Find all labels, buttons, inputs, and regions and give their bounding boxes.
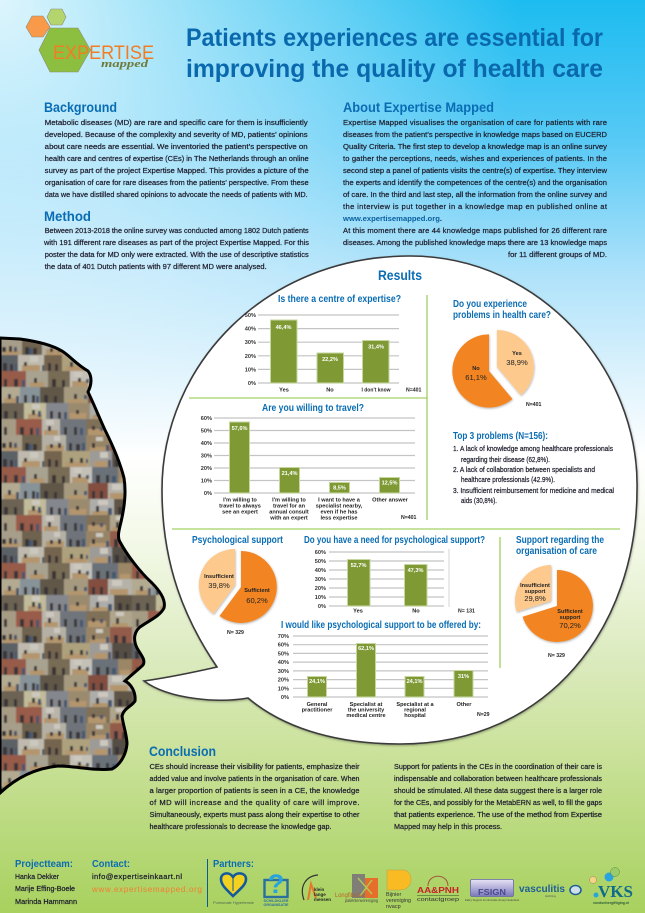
chart: are you willing to travel: 12,5% bbox=[382, 480, 397, 486]
chart: do you experience problems in health care: 61,1% bbox=[465, 373, 487, 382]
logo: longfibrose: Longfibrose bbox=[335, 893, 366, 899]
panel: about expertise mapped bbox=[342, 100, 608, 259]
top 3 problems: regarding their disease (62,8%). bbox=[461, 455, 550, 464]
chart: are you willing to travel: less expertise bbox=[320, 516, 358, 522]
chart title: Psychological support bbox=[192, 535, 283, 546]
chart: is there a centre of expertise: 50% bbox=[245, 313, 256, 319]
chart: are you willing to travel: I'm willing to bbox=[272, 498, 306, 504]
chart: are you willing to travel: see an expert bbox=[222, 510, 258, 516]
logo: vasculitis bbox=[519, 884, 581, 898]
logo: FSIGN bbox=[465, 880, 519, 902]
text: method body: the data of 401 Dutch patients with 97 different MD were analysed. bbox=[45, 262, 267, 271]
chart: psychological support: 39,8% bbox=[208, 581, 230, 590]
title: improving the quality of health care bbox=[186, 55, 603, 83]
chart: are you willing to travel: N=401 bbox=[401, 515, 417, 521]
chart: is there a centre of expertise bbox=[245, 294, 422, 394]
heading: about: About Expertise Mapped bbox=[343, 100, 494, 115]
text: about body: to gather the perceptions, needs, wishes and experiences of patients. In the bbox=[343, 154, 607, 163]
logo: klein lange mensen: lange bbox=[314, 892, 326, 897]
footer: project team: Hanka Dekker bbox=[15, 872, 59, 881]
chart: are you willing to travel: specialist nearby, bbox=[316, 504, 363, 510]
chart: do you experience problems in health care: Yes bbox=[512, 351, 522, 357]
logo: question mark: ORGANISATIE bbox=[264, 903, 289, 907]
chart: need for psychological support: 20% bbox=[315, 586, 326, 592]
chart: are you willing to travel: Other answer bbox=[372, 498, 409, 504]
text: conclusion left column bbox=[150, 762, 360, 831]
text: background body: developed. Because of the complexity and severity of MD, patients’ opinions bbox=[45, 130, 308, 139]
logo: VKS: voedselvergiftiging.nl bbox=[593, 901, 629, 905]
chart: psychological support to be offered by: 50% bbox=[278, 651, 289, 657]
chart: psychological support to be offered by: 30% bbox=[278, 669, 289, 675]
chart: are you willing to travel: 57,6% bbox=[232, 426, 247, 432]
chart: support regarding the organisation of care: organisation of care bbox=[516, 546, 597, 557]
chart: psychological support to be offered by: 24,1% bbox=[309, 679, 325, 685]
text: method body bbox=[43, 226, 309, 271]
logo: AA&PNH contactgroep: AA&PNH bbox=[417, 886, 459, 895]
text: about body: diseases from the patient’s perspective in knowledge maps based on EUCERD bbox=[343, 130, 608, 139]
text: background body: survey as part of the project Expertise Mapped. This provides a picture of the bbox=[45, 166, 309, 175]
footer: contact: www.expertisemapped.org bbox=[91, 885, 202, 894]
chart: are you willing to travel: travel to always bbox=[219, 504, 261, 510]
top 3 problems: 3. Insufficient reimbursement for medicine and medical bbox=[453, 486, 614, 495]
text: about body: www.expertisemapped.org. bbox=[342, 214, 442, 223]
chart: need for psychological support: 10% bbox=[315, 595, 326, 601]
chart: support regarding the organisation of care: Sufficient bbox=[557, 609, 583, 615]
chart: are you willing to travel: annual consult bbox=[269, 510, 309, 516]
chart: do you experience problems in health care: problems in health care? bbox=[453, 310, 551, 321]
chart: are you willing to travel: 60% bbox=[201, 416, 212, 422]
chart: are you willing to travel: 8,5% bbox=[333, 486, 346, 492]
chart title: I would like psychological support to be offered by: bbox=[281, 620, 481, 631]
text: conclusion right column: that patients experience. The use of the method from Expertise bbox=[394, 810, 602, 819]
chart: is there a centre of expertise: 30% bbox=[245, 340, 256, 346]
chart: psychological support to be offered by: 0% bbox=[281, 695, 289, 701]
chart: is there a centre of expertise: Yes bbox=[279, 388, 289, 394]
chart title: Are you willing to travel? bbox=[262, 403, 364, 414]
chart: support regarding the organisation of care: 70,2% bbox=[559, 621, 581, 630]
chart: are you willing to travel: travel for an bbox=[273, 504, 306, 510]
chart: psychological support to be offered by: the university bbox=[348, 708, 385, 714]
text: about body: for 11 different groups of MD. bbox=[508, 250, 607, 259]
chart: are you willing to travel: 21,4% bbox=[282, 471, 297, 477]
chart: psychological support to be offered by: practitioner bbox=[302, 708, 333, 714]
text: about body: diseases. Among the published knowledge maps there are 13 knowledge maps bbox=[343, 238, 607, 247]
text: about body: Expertise Mapped visualises the organisation of care for patients with rare bbox=[343, 118, 607, 127]
chart: psychological support to be offered by: Specialist at a bbox=[396, 702, 435, 708]
chart: support regarding the organisation of care: 29,8% bbox=[524, 594, 546, 603]
footer: partners bbox=[208, 858, 633, 910]
chart: need for psychological support: No bbox=[412, 608, 420, 614]
chart: psychological support to be offered by bbox=[278, 620, 490, 719]
chart: support regarding the organisation of care bbox=[515, 535, 604, 659]
logo: question mark bbox=[264, 869, 289, 907]
text: conclusion left column: added value and involve patients in the organisation of care. When bbox=[150, 774, 360, 783]
logo: longfibrose bbox=[335, 874, 378, 903]
chart: are you willing to travel: even if he has bbox=[320, 510, 358, 516]
chart: are you willing to travel bbox=[201, 403, 417, 522]
heading: results: Results bbox=[378, 268, 422, 283]
chart: psychological support to be offered by: medical centre bbox=[346, 713, 386, 719]
panel: conclusion bbox=[149, 744, 602, 831]
logo: question mark: SCHILDKLIER bbox=[264, 899, 289, 903]
footer: contact bbox=[91, 858, 202, 894]
logo: VKS bbox=[590, 868, 633, 905]
text: background body: health care and centres of expertise (CEs) in The Netherlands through an online bbox=[45, 154, 309, 163]
chart: do you experience problems in health care: No bbox=[472, 366, 480, 372]
logo: VKS: VKS bbox=[598, 882, 633, 901]
chart: psychological support to be offered by: 70% bbox=[278, 634, 289, 640]
chart: need for psychological support: 60% bbox=[315, 550, 326, 556]
chart: support regarding the organisation of care: support bbox=[525, 589, 546, 595]
logo: bijnier vereniging nvacp bbox=[386, 870, 411, 910]
text: background body: organisation of care for rare diseases from the patients’ perspective. From these bbox=[45, 178, 309, 187]
chart: is there a centre of expertise: 22,2% bbox=[322, 357, 338, 363]
chart: support regarding the organisation of care: Insufficient bbox=[520, 583, 550, 589]
chart: are you willing to travel: 20% bbox=[201, 466, 212, 472]
footer: project team bbox=[15, 858, 77, 906]
panel: method bbox=[43, 209, 309, 271]
footer: contact: Contact: bbox=[92, 858, 130, 870]
text: conclusion right column: for the CEs, and possibly for the MetabERN as well, to fill the gaps bbox=[394, 798, 602, 807]
chart: do you experience problems in health care: N=401 bbox=[526, 402, 542, 408]
footer: project team: Marije Effing-Boele bbox=[15, 884, 75, 893]
text: method body: Between 2013-2018 the online survey was conducted among 1802 Dutch patients bbox=[45, 226, 309, 235]
text: conclusion left column: a larger proportion of patients is seen in a CE, the knowledge bbox=[150, 786, 360, 795]
chart: support regarding the organisation of care: N= 329 bbox=[548, 653, 565, 659]
logo: question mark: ? bbox=[268, 869, 284, 899]
logo: Expertise Mapped: EXPERTISE bbox=[53, 43, 154, 64]
logo: klein lange mensen bbox=[302, 875, 331, 902]
footer: project team: Projectteam: bbox=[15, 858, 73, 870]
heading: method: Method bbox=[44, 209, 91, 224]
logo: AA&PNH contactgroep: contactgroep bbox=[417, 897, 459, 903]
chart: is there a centre of expertise: 46,4% bbox=[276, 325, 291, 331]
chart: psychological support to be offered by: 62,1% bbox=[358, 646, 374, 652]
chart: need for psychological support: Yes bbox=[353, 608, 363, 614]
chart title: Is there a centre of expertise? bbox=[278, 294, 401, 305]
logo: AA&PNH contactgroep bbox=[417, 876, 459, 903]
chart: psychological support to be offered by: 31% bbox=[458, 674, 469, 680]
chart: is there a centre of expertise: 10% bbox=[245, 368, 256, 374]
text: about body bbox=[342, 118, 608, 259]
text: conclusion right column: should be stimulated. All these data suggest there is a larger role bbox=[394, 786, 602, 795]
chart: need for psychological support: 52,7% bbox=[351, 563, 366, 569]
logo: pulmonale hypertensie: Pulmonale Hypertensie bbox=[213, 901, 254, 905]
footer: partners: Partners: bbox=[213, 858, 254, 870]
text: about body: of care. In the third and last step, all the information from the online survey and bbox=[343, 190, 607, 199]
chart: psychological support: Sufficient bbox=[244, 588, 270, 594]
text: about body: the experts and identify the competences of the centre(s) and the organisation bbox=[343, 178, 607, 187]
text: conclusion right column bbox=[394, 762, 602, 831]
text: background body: data we have distilled shared opinions to advocate the needs of patients with MD. bbox=[45, 190, 308, 199]
logo: vasculitis: stichting bbox=[545, 894, 556, 898]
chart: need for psychological support: N= 131 bbox=[458, 608, 475, 614]
dividers bbox=[172, 295, 620, 668]
chart: need for psychological support: 47,3% bbox=[408, 568, 423, 574]
chart: are you willing to travel: 40% bbox=[201, 441, 212, 447]
panel: background bbox=[44, 100, 309, 199]
chart: psychological support: Insufficient bbox=[204, 574, 234, 580]
chart: is there a centre of expertise: 31,4% bbox=[368, 344, 384, 350]
text: background body bbox=[45, 118, 309, 199]
chart: psychological support: 60,2% bbox=[246, 596, 268, 605]
chart: do you experience problems in health care: 38,9% bbox=[506, 358, 528, 367]
text: conclusion right column: indispensable and collaboration between healthcare professionals bbox=[394, 774, 602, 783]
top 3 problems: 2. A lack of collaboration between specialists and bbox=[453, 465, 595, 474]
footer: contact: info@expertiseinkaart.nl bbox=[92, 872, 182, 881]
text: conclusion right column: Support for patients in the CEs in the coordination of their care is bbox=[394, 762, 602, 771]
chart: need for psychological support: 40% bbox=[315, 568, 326, 574]
chart: are you willing to travel: with an expert bbox=[269, 516, 308, 522]
text: about body: Quality Criteria. The first step to develop a knowledge map is an online survey bbox=[343, 142, 607, 151]
chart: psychological support to be offered by: 20% bbox=[278, 678, 289, 684]
logo: bijnier vereniging nvacp: Bijnier bbox=[386, 892, 401, 898]
logo: bijnier vereniging nvacp: vereniging bbox=[386, 898, 411, 904]
chart: psychological support to be offered by: General bbox=[307, 702, 328, 708]
title bbox=[186, 24, 603, 83]
top 3 problems: 1. A lack of knowledge among healthcare professionals bbox=[453, 444, 613, 453]
logo: vasculitis: vasculitis bbox=[519, 884, 565, 895]
chart title: Do you have a need for psychological support? bbox=[304, 535, 485, 546]
text: conclusion left column: Simultaneously, experts must pass along their expertise to other bbox=[150, 810, 360, 819]
chart: psychological support to be offered by: N=29 bbox=[477, 712, 490, 718]
chart: need for psychological support bbox=[304, 535, 485, 614]
top 3 problems bbox=[453, 431, 614, 505]
logo: klein lange mensen: mensen bbox=[314, 897, 331, 902]
chart: psychological support to be offered by: 40% bbox=[278, 660, 289, 666]
chart: are you willing to travel: 10% bbox=[201, 478, 212, 484]
footer: project team: Marinda Hammann bbox=[15, 897, 77, 906]
chart: is there a centre of expertise: N=401 bbox=[406, 388, 422, 394]
chart: psychological support: N= 329 bbox=[227, 630, 244, 636]
top 3 problems: healthcare professionals (42.9%). bbox=[461, 475, 555, 484]
text: about body: the interview is put together in a knowledge map en published online at bbox=[343, 202, 608, 211]
text: background body: Metabolic diseases (MD) are rare and specific care for them is insufficiently bbox=[45, 118, 308, 127]
chart: psychological support to be offered by: 10% bbox=[278, 686, 289, 692]
chart: is there a centre of expertise: 20% bbox=[245, 354, 256, 360]
heading: background: Background bbox=[44, 100, 117, 115]
chart: is there a centre of expertise: No bbox=[326, 388, 334, 394]
chart: is there a centre of expertise: 40% bbox=[245, 327, 256, 333]
chart: need for psychological support: 50% bbox=[315, 559, 326, 565]
text: about body: second step a panel of patients visits the centre(s) of expertise. They interview bbox=[343, 166, 608, 175]
text: background body: about care needs are essential. We inventoried the patient’s perspective on bbox=[45, 142, 308, 151]
chart: need for psychological support: 30% bbox=[315, 577, 326, 583]
heading: top 3: Top 3 problems (N=156): bbox=[453, 431, 548, 442]
chart: psychological support to be offered by: Specialist at bbox=[350, 702, 382, 708]
text: conclusion right column: Mapped may help in this process. bbox=[394, 822, 502, 831]
speech bubble bbox=[144, 256, 637, 744]
title: Patients experiences are essential for bbox=[186, 24, 603, 52]
heading: conclusion: Conclusion bbox=[149, 744, 216, 759]
text: method body: with 191 different rare diseases as part of the project Expertise Mapped. For this bbox=[43, 238, 309, 247]
photo mosaic face silhouette bbox=[0, 338, 164, 793]
chart: support regarding the organisation of care: support bbox=[560, 615, 581, 621]
chart: psychological support to be offered by: Other bbox=[457, 702, 472, 708]
chart: are you willing to travel: I want to have a bbox=[318, 498, 361, 504]
logo: Expertise Mapped bbox=[26, 9, 154, 72]
text: conclusion left column: CEs should increase their visibility for patients, emphasize their bbox=[150, 762, 360, 771]
chart: are you willing to travel: 30% bbox=[201, 454, 212, 460]
chart: need for psychological support: 0% bbox=[318, 604, 326, 610]
text: conclusion left column: of MD will increase and the quality of care will improve. bbox=[150, 798, 360, 807]
chart: psychological support bbox=[192, 535, 283, 636]
chart: psychological support to be offered by: regional bbox=[404, 708, 426, 714]
chart: are you willing to travel: 0% bbox=[204, 491, 212, 497]
chart: are you willing to travel: I'm willing to bbox=[223, 498, 257, 504]
chart: psychological support to be offered by: 24,1% bbox=[407, 679, 422, 685]
logo: bijnier vereniging nvacp: nvacp bbox=[386, 904, 401, 910]
text: conclusion left column: healthcare professionals to decrease the knowledge gap. bbox=[150, 822, 332, 831]
top 3 problems: aids (30,8%). bbox=[461, 496, 497, 505]
chart: do you experience problems in health care bbox=[452, 299, 551, 408]
chart: are you willing to travel: 50% bbox=[201, 428, 212, 434]
logo: klein lange mensen: klein bbox=[314, 887, 325, 892]
logo: longfibrose: patiëntenvereniging bbox=[345, 898, 378, 903]
text: about body: At this moment there are 44 knowledge maps published for 26 different rare bbox=[343, 226, 607, 235]
chart title: Support regarding the bbox=[516, 535, 604, 546]
logo: pulmonale hypertensie bbox=[213, 873, 254, 905]
chart: is there a centre of expertise: 0% bbox=[248, 381, 256, 387]
chart: is there a centre of expertise: I don’t know bbox=[362, 388, 391, 394]
chart title: Do you experience bbox=[453, 299, 527, 310]
logo: FSIGN: Fabry Support & Informatie Groep Nederland bbox=[465, 898, 519, 902]
text: method body: poster the data for MD only were extracted. With the use of descriptive statistics bbox=[45, 250, 309, 259]
logo: Expertise Mapped: mapped bbox=[101, 59, 149, 70]
chart: psychological support to be offered by: 60% bbox=[278, 643, 289, 649]
logo: FSIGN: FSIGN bbox=[478, 888, 506, 897]
chart: psychological support to be offered by: hospital bbox=[404, 713, 426, 719]
